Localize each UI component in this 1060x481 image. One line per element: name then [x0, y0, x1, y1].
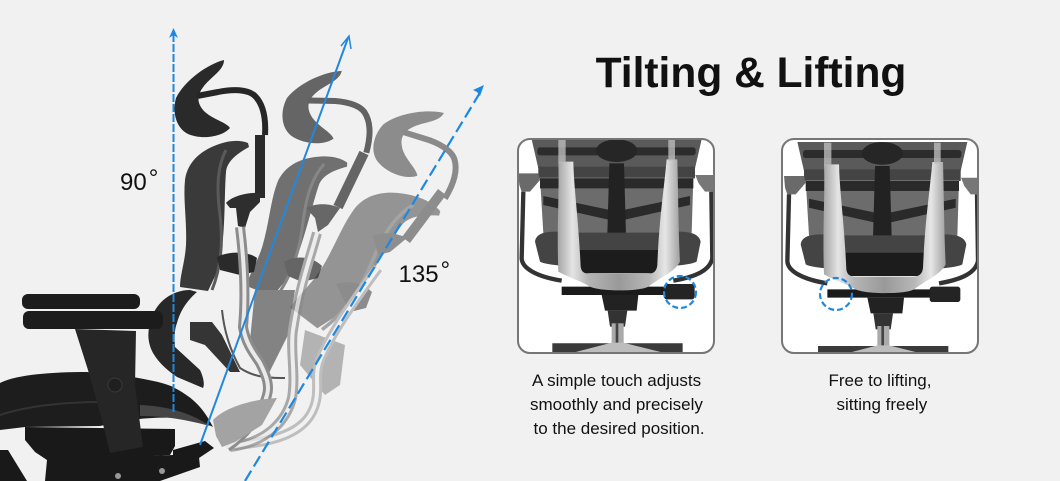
caption: lifting adjustment: Free to lifting, — [828, 371, 932, 390]
chair rear view — [518, 139, 714, 353]
arrow: 90 degree line — [169, 28, 178, 412]
dashed highlight circle — [664, 276, 696, 308]
caption: tilt adjustment — [530, 371, 705, 438]
chair illustration with three recline positions — [0, 60, 480, 481]
caption: tilt adjustment: to the desired position. — [534, 419, 705, 438]
recline pivot bracket — [213, 398, 277, 447]
label: 135 degrees: 135 — [398, 261, 439, 288]
panel: lifting adjustment photo — [782, 139, 980, 355]
recline position: 135 degrees — [234, 111, 459, 450]
arrow: mid tilt line — [200, 36, 351, 445]
title: Tilting & Lifting — [596, 50, 906, 97]
armrests — [22, 294, 163, 453]
dashed highlight circle — [820, 278, 852, 310]
chair rear view — [784, 142, 980, 355]
seat base mechanism — [0, 427, 214, 481]
caption: lifting adjustment — [828, 371, 932, 414]
label: 90 degrees: 90 — [120, 169, 147, 196]
label: 90 degrees: ° — [149, 165, 158, 192]
caption: tilt adjustment: smoothly and precisely — [530, 395, 703, 414]
seat — [0, 372, 213, 430]
recline position: 90 degrees — [174, 60, 285, 447]
label: 135 degrees: ° — [441, 257, 450, 284]
panel: tilt adjustment photo — [518, 139, 714, 353]
caption: tilt adjustment: A simple touch adjusts — [532, 371, 701, 390]
recline position: mid tilt — [230, 61, 382, 447]
lower back support — [148, 290, 240, 388]
arrow: 135 degree line — [245, 85, 484, 481]
caption: lifting adjustment: sitting freely — [836, 395, 928, 414]
